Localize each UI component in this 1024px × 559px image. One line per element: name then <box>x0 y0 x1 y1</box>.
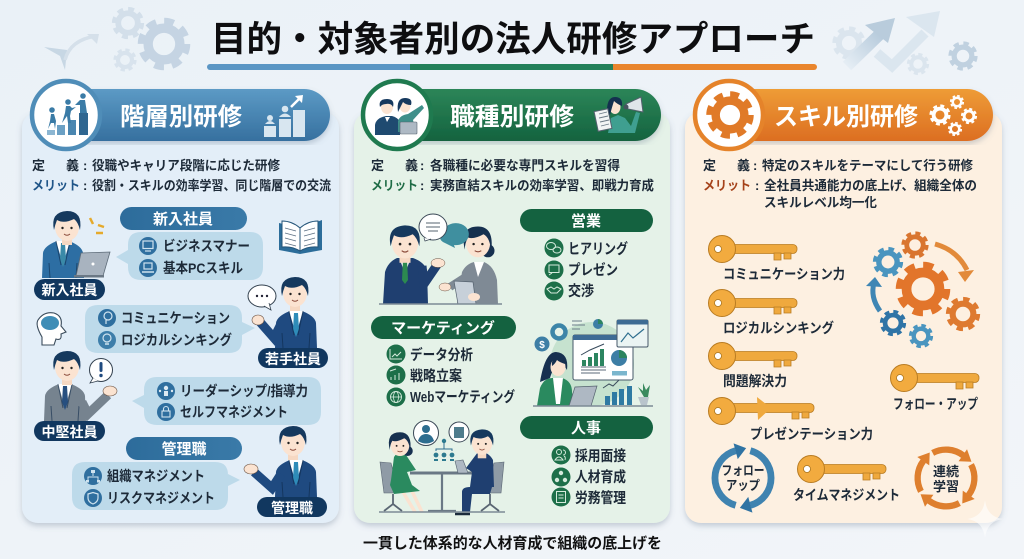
bubble: 中堅社員 skills: リーダーシップ/指導力 <box>180 383 308 399</box>
definition text: 定 <box>371 158 384 173</box>
illustration: sales conversation <box>379 214 502 304</box>
list: 営業: ヒアリング <box>568 240 628 258</box>
definition text: : <box>420 178 424 193</box>
pill: マーケティング: マーケティング <box>391 319 495 337</box>
speech bubble <box>248 285 276 310</box>
cycle: 連続学習 <box>910 442 982 514</box>
panel background <box>354 112 670 523</box>
icon: org chart <box>84 467 102 485</box>
definition text: 義 <box>66 158 79 173</box>
person: 新入社員 with laptop <box>42 211 110 278</box>
bubble: 新入社員 skills <box>116 232 263 280</box>
list: 人事: 労務管理 <box>575 489 626 507</box>
panel: スキル別研修 <box>685 81 1002 523</box>
bubble: 中堅社員 skills: セルフマネジメント <box>180 404 288 420</box>
icon: labor document <box>552 488 570 506</box>
definition text: 特定のスキルをテーマにして行う研修 <box>762 158 973 173</box>
list: 人事 <box>552 446 626 507</box>
definition text: メリット <box>703 178 751 193</box>
cycle: 連続学習: 学習 <box>933 479 959 494</box>
icon: talent development <box>552 468 570 486</box>
label: 中堅社員: 中堅社員 <box>42 424 98 440</box>
bubble: 新入社員 skills: ビジネスマナー <box>163 238 250 254</box>
decoration: gears and paper plane, top left <box>44 9 187 70</box>
key: フォロー・アップ <box>890 364 979 412</box>
key: タイムマネジメント <box>793 456 900 503</box>
label: 新入社員 <box>34 279 105 300</box>
bubble: 管理職 skills: リスクマネジメント <box>107 490 215 506</box>
list: 人事: 採用面接 <box>575 448 626 465</box>
definition text: 役割・スキルの効率学習、同じ階層での交流 <box>92 178 331 193</box>
definition text: : <box>755 178 759 193</box>
pill: マーケティング <box>371 316 516 339</box>
definition text <box>703 158 977 210</box>
definition text: メリット <box>371 178 418 193</box>
pill: 人事 <box>520 416 653 439</box>
definition text: 義 <box>405 158 418 173</box>
icon: open book <box>279 220 322 254</box>
definition text: 義 <box>737 158 750 173</box>
person: 若手社員 <box>248 277 317 348</box>
key: フォロー・アップ: フォロー・アップ <box>893 396 978 412</box>
pill: 新入社員 <box>120 207 247 230</box>
header banner <box>32 81 330 149</box>
bubble: 若手社員 skills: コミュニケーション <box>121 310 230 326</box>
illustration: marketing analyst with dashboard <box>533 319 653 406</box>
label: 中堅社員 <box>34 421 105 441</box>
illustration: marketing analyst with dashboard: $ <box>539 340 545 351</box>
cycle: フォローアップ: アップ <box>726 478 760 493</box>
icon: shield <box>84 489 102 507</box>
bubble: 管理職 skills: 組織マネジメント <box>107 468 205 484</box>
definition text: : <box>420 158 424 173</box>
list: マーケティング: 戦略立案 <box>410 367 462 385</box>
icon: interview <box>552 446 570 464</box>
list: 営業: プレゼン <box>568 261 618 279</box>
list: マーケティング: Webマーケティング <box>410 388 515 406</box>
pill: 新入社員: 新入社員 <box>153 211 213 228</box>
icon: brain head <box>37 313 66 345</box>
list: 営業: 交渉 <box>568 283 594 300</box>
icon: presentation <box>544 260 564 280</box>
definition text <box>371 158 654 193</box>
icon: hearing <box>544 238 564 258</box>
definition text: 定 <box>32 158 45 173</box>
bubble: 若手社員 skills: ロジカルシンキング <box>121 332 232 348</box>
icon: light bulb <box>98 331 116 349</box>
key: コミュニケーション力 <box>708 236 845 282</box>
pill: 営業: 営業 <box>571 212 601 230</box>
label: 管理職 <box>257 497 327 517</box>
header banner: 職種別研修 <box>450 103 575 131</box>
definition text: : <box>753 158 757 173</box>
definition text: : <box>83 178 87 193</box>
icon: monitor <box>139 237 157 255</box>
label: 若手社員 <box>258 348 328 368</box>
label: 若手社員: 若手社員 <box>265 351 321 367</box>
pill: 人事: 人事 <box>571 419 601 437</box>
key: 問題解決力 <box>708 342 797 389</box>
key: コミュニケーション力: コミュニケーション力 <box>723 266 845 282</box>
definition text: 実務直結スキルの効率学習、即戦力育成 <box>430 178 654 193</box>
icon: sparkle watermark <box>967 500 1003 538</box>
definition text: 定 <box>703 158 716 173</box>
definition text: スキルレベル均一化 <box>764 195 877 210</box>
title underline <box>207 64 817 70</box>
thought bubbles and org chart <box>414 420 469 460</box>
header banner <box>695 81 993 149</box>
icon: laptop <box>139 259 157 277</box>
header banner: 階層別研修 <box>120 103 242 131</box>
icon: globe <box>386 388 406 406</box>
pill: 管理職 <box>126 437 242 460</box>
icon: leadership <box>157 382 175 400</box>
icon: data analysis <box>386 344 406 364</box>
definition text <box>32 158 331 193</box>
definition text: メリット <box>32 178 80 193</box>
alert bubble <box>90 358 112 383</box>
icon: strategy <box>386 366 406 384</box>
label: 新入社員: 新入社員 <box>42 282 98 298</box>
man seated <box>455 429 494 514</box>
decoration: gears and growth arrows, top right <box>834 11 976 74</box>
gear cluster with rotating arrows <box>866 233 978 347</box>
pill: 営業 <box>520 209 653 232</box>
header banner: スキル別研修 <box>774 103 918 131</box>
header banner <box>363 81 661 149</box>
bubble: 中堅社員 skills <box>132 377 321 425</box>
definition text: : <box>83 158 87 173</box>
list: 人事: 人材育成 <box>575 468 626 486</box>
definition text: 全社員共通能力の底上げ、組織全体の <box>764 178 977 193</box>
pill: 管理職: 管理職 <box>161 440 207 458</box>
cycle: フォローアップ <box>715 443 771 513</box>
list: 営業 <box>544 238 628 300</box>
key: タイムマネジメント: タイムマネジメント <box>793 487 900 503</box>
bubble: 若手社員 skills <box>85 305 255 353</box>
key: 問題解決力: 問題解決力 <box>723 373 787 389</box>
icon: communication <box>98 309 116 327</box>
person: 中堅社員 <box>44 351 117 421</box>
bubble: 新入社員 skills: 基本PCスキル <box>163 260 243 276</box>
key: ロジカルシンキング: ロジカルシンキング <box>723 320 834 336</box>
panel background <box>22 112 339 523</box>
cycle: フォローアップ: フォロー <box>722 463 764 478</box>
person: 管理職 <box>244 426 317 497</box>
cycle: 連続学習: 連続 <box>933 464 959 479</box>
definition text: 各職種に必要な専門スキルを習得 <box>430 158 620 173</box>
panel: 職種別研修 <box>354 81 670 523</box>
panel background <box>685 112 1002 523</box>
icon: handshake <box>544 282 564 300</box>
panel: 階層別研修 <box>22 81 339 523</box>
list: マーケティング <box>386 344 515 406</box>
key: ロジカルシンキング <box>708 290 834 336</box>
icon: lock <box>157 403 175 421</box>
list: マーケティング: データ分析 <box>410 346 473 364</box>
illustration: HR interview <box>379 420 505 514</box>
bubble: 管理職 skills <box>72 462 240 510</box>
icon: woman with megaphone <box>594 97 643 133</box>
key: プレゼンテーション力: プレゼンテーション力 <box>750 426 873 442</box>
definition text: 役職やキャリア段階に応じた研修 <box>92 158 280 173</box>
title: 目的・対象者別の法人研修アプローチ <box>211 19 815 59</box>
speech bubbles <box>419 214 469 248</box>
footer message: 一貫した体系的な人材育成で組織の底上げを <box>363 534 662 552</box>
key: プレゼンテーション力 <box>708 397 873 442</box>
woman seated <box>389 432 422 512</box>
label: 管理職: 管理職 <box>271 500 313 516</box>
